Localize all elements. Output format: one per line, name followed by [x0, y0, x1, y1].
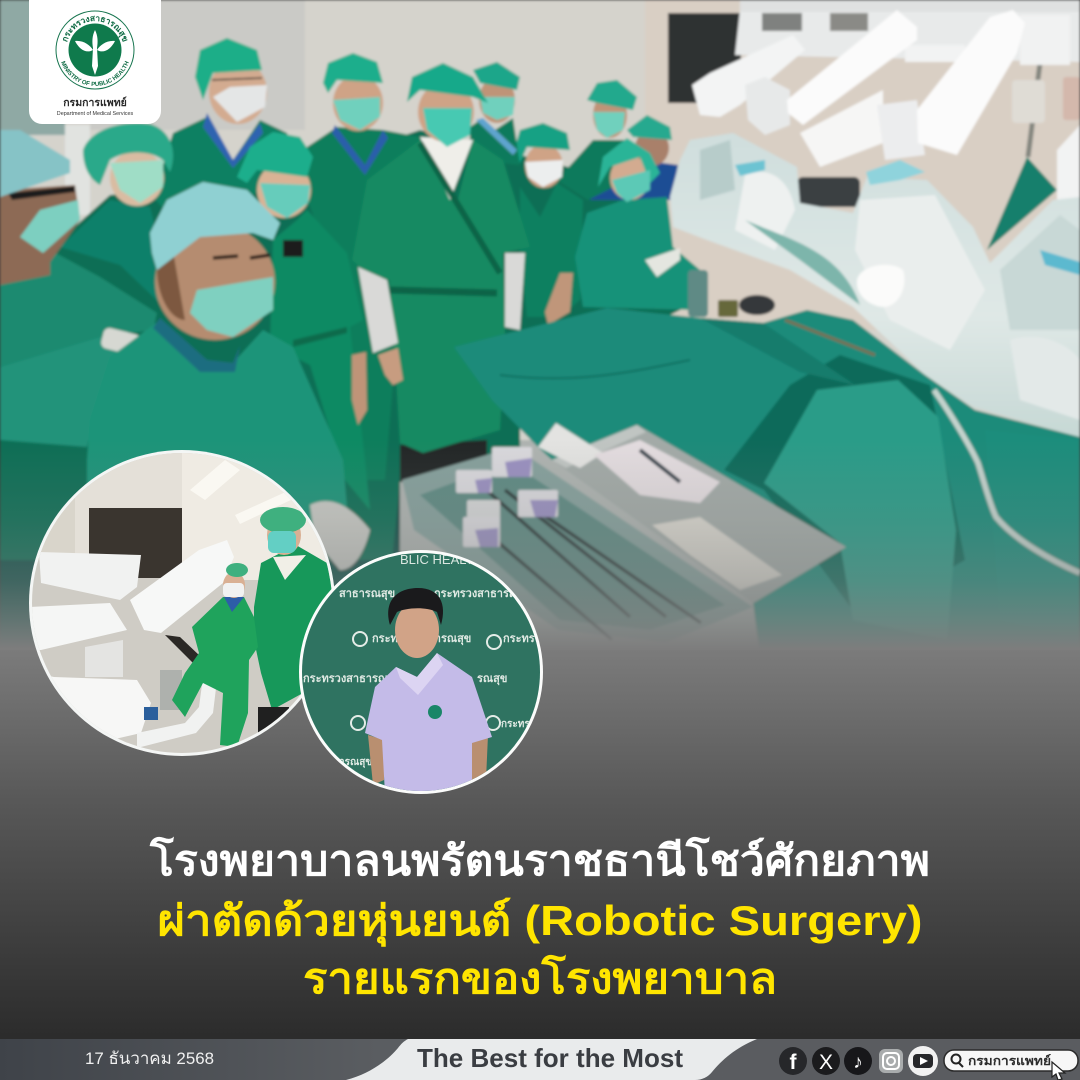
side folds — [700, 318, 855, 385]
arms — [368, 735, 488, 785]
face — [395, 608, 439, 658]
icon: tiktok: ♪ — [853, 1052, 863, 1073]
right beige wall — [645, 0, 1080, 330]
joint B — [745, 77, 790, 135]
department logo badge: กรมการแพทย์ — [63, 96, 127, 109]
person: woman in scrubs with white mask — [515, 123, 583, 325]
wall screen — [89, 508, 182, 578]
blue tape — [866, 160, 925, 185]
operating table drape — [454, 308, 1080, 660]
instrument table items — [688, 270, 875, 355]
floor and lower background — [340, 440, 1080, 660]
person: left man — [0, 130, 157, 447]
console block — [800, 90, 883, 167]
console head — [130, 540, 234, 633]
department logo badge — [29, 0, 161, 124]
upper tray — [552, 425, 846, 603]
icon: facebook — [779, 1047, 807, 1075]
headline — [149, 836, 930, 1002]
left wall panel — [90, 0, 305, 130]
room wall — [0, 0, 1080, 660]
inset photo: portrait of hospital director: กระทรวง — [501, 719, 540, 730]
armrest tablet — [165, 635, 198, 662]
person: rear man behind director — [470, 62, 520, 165]
draped knee fold — [764, 380, 956, 640]
left tray — [402, 447, 753, 643]
search pill: กรมการแพทย์ — [968, 1054, 1051, 1068]
wall monitor — [668, 13, 741, 103]
inset photo: portrait of hospital director: รณสุข — [477, 673, 507, 686]
arm B — [787, 10, 917, 125]
headline line 3: รายแรกของโรงพยาบาล — [303, 954, 777, 1002]
inset photo: portrait of hospital director: กระทรวงสาธารณสุข — [434, 588, 533, 601]
dark lower-left background — [0, 430, 400, 660]
department logo badge: Department of Medical Services — [57, 111, 133, 117]
person: back row man right — [557, 80, 637, 200]
inset photo: portrait of hospital director: กระทรวงสาธารณสุข — [303, 673, 402, 686]
surgical robot arms — [692, 0, 1080, 210]
robot plastic covers — [670, 133, 1080, 437]
console top — [39, 552, 141, 600]
window frame — [65, 125, 90, 215]
console joint — [85, 640, 123, 677]
icon: youtube — [908, 1046, 938, 1076]
icon: facebook: f — [790, 1051, 798, 1074]
inset photo: portrait of hospital director: กระทรวง — [503, 633, 546, 645]
right drape — [985, 430, 1080, 640]
icon: X: X — [819, 1051, 833, 1074]
joint C — [877, 100, 925, 160]
instrument handles — [652, 517, 782, 590]
background photo: operating room team and surgical robot — [0, 0, 1080, 660]
inset photo: portrait of hospital director: BLIC HEALTH, — [400, 552, 486, 567]
slogan ribbon — [346, 1039, 757, 1080]
white napkin — [538, 423, 603, 468]
IV pole and bags — [1012, 63, 1080, 157]
ceiling lights — [190, 460, 295, 524]
inset photo: portrait of hospital director: ารณสุข — [339, 757, 372, 768]
window at left — [0, 0, 65, 135]
headline line 1: โรงพยาบาลนพรัตนราชธานีโชว์ศักยภาพ — [149, 836, 930, 884]
person: woman second from left — [60, 123, 173, 310]
console seat — [52, 676, 151, 738]
ministry seal: MINISTRY OF PUBLIC HEALTH — [61, 60, 129, 86]
inset photo: portrait of hospital director: กระทรวงสาธารณสุข — [372, 633, 471, 646]
inset photo: portrait of hospital director — [299, 550, 546, 794]
console pedestal — [137, 683, 216, 747]
inset photo: portrait of hospital director: สาธารณสุข — [339, 588, 395, 601]
icon: instagram — [879, 1049, 903, 1073]
inset photo: robot console with two surgeons — [29, 450, 337, 756]
sterile pouch — [594, 440, 720, 503]
person: glasses man back row — [153, 38, 300, 213]
standing surgeon — [254, 545, 332, 710]
person: woman with crossed arms near robot — [575, 138, 700, 310]
headline line 2: ผ่าตัดด้วยหุ่นยนต์ (Robotic Surgery) — [158, 897, 922, 947]
rods — [483, 487, 701, 640]
person: director in centre — [352, 63, 530, 482]
instrument cartridges — [456, 470, 492, 493]
boom housing — [735, 10, 1080, 62]
person: front man — [87, 182, 370, 570]
person: back row man centre-left — [300, 53, 420, 480]
person: rear man with blue scrubs — [590, 115, 678, 200]
search pill — [944, 1050, 1078, 1080]
icon: tiktok — [844, 1047, 872, 1075]
instrument tray — [402, 423, 846, 643]
icon: X — [812, 1047, 840, 1075]
slogan: The Best for the Most — [417, 1043, 683, 1073]
dark fold under drape — [724, 355, 965, 620]
person: woman centre-left — [237, 132, 370, 510]
rear green curtain — [987, 157, 1057, 250]
arm A — [692, 35, 805, 117]
dark gradient lower panel — [0, 650, 1080, 1042]
date: 17 ธันวาคม 2568 — [85, 1049, 214, 1068]
seated surgeon — [172, 597, 258, 747]
white ball — [857, 265, 904, 307]
shirt — [365, 653, 492, 794]
cable — [934, 390, 1080, 573]
icon: cursor — [1052, 1062, 1065, 1080]
grey fade overlay — [0, 440, 1080, 660]
ministry seal — [56, 10, 134, 90]
console middle — [30, 603, 127, 650]
crowd of gowns behind the team — [0, 130, 700, 560]
ministry seal: กระทรวงสาธารณสุข — [63, 16, 128, 42]
footer bar — [0, 1039, 1080, 1080]
arm C — [917, 10, 1025, 155]
right robot column — [1057, 125, 1080, 210]
